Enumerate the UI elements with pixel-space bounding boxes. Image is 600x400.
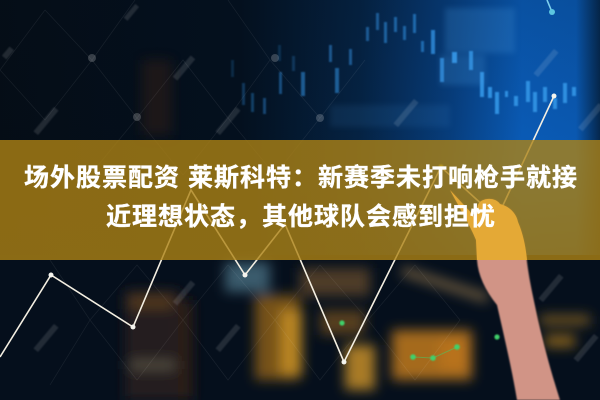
dotted world map hint	[330, 8, 515, 127]
title line 1: 场外股票配资 莱斯科特：新赛季未打响枪手就接	[24, 164, 578, 192]
title line 2: 近理想状态，其他球队会感到担忧	[106, 203, 496, 231]
dim warm reflection	[142, 60, 172, 135]
icon: hand pointing at chart	[450, 190, 560, 400]
candlesticks	[231, 13, 576, 114]
gold title band	[0, 140, 600, 260]
watermark lattice	[0, 0, 460, 385]
city lights bokeh	[125, 262, 590, 400]
